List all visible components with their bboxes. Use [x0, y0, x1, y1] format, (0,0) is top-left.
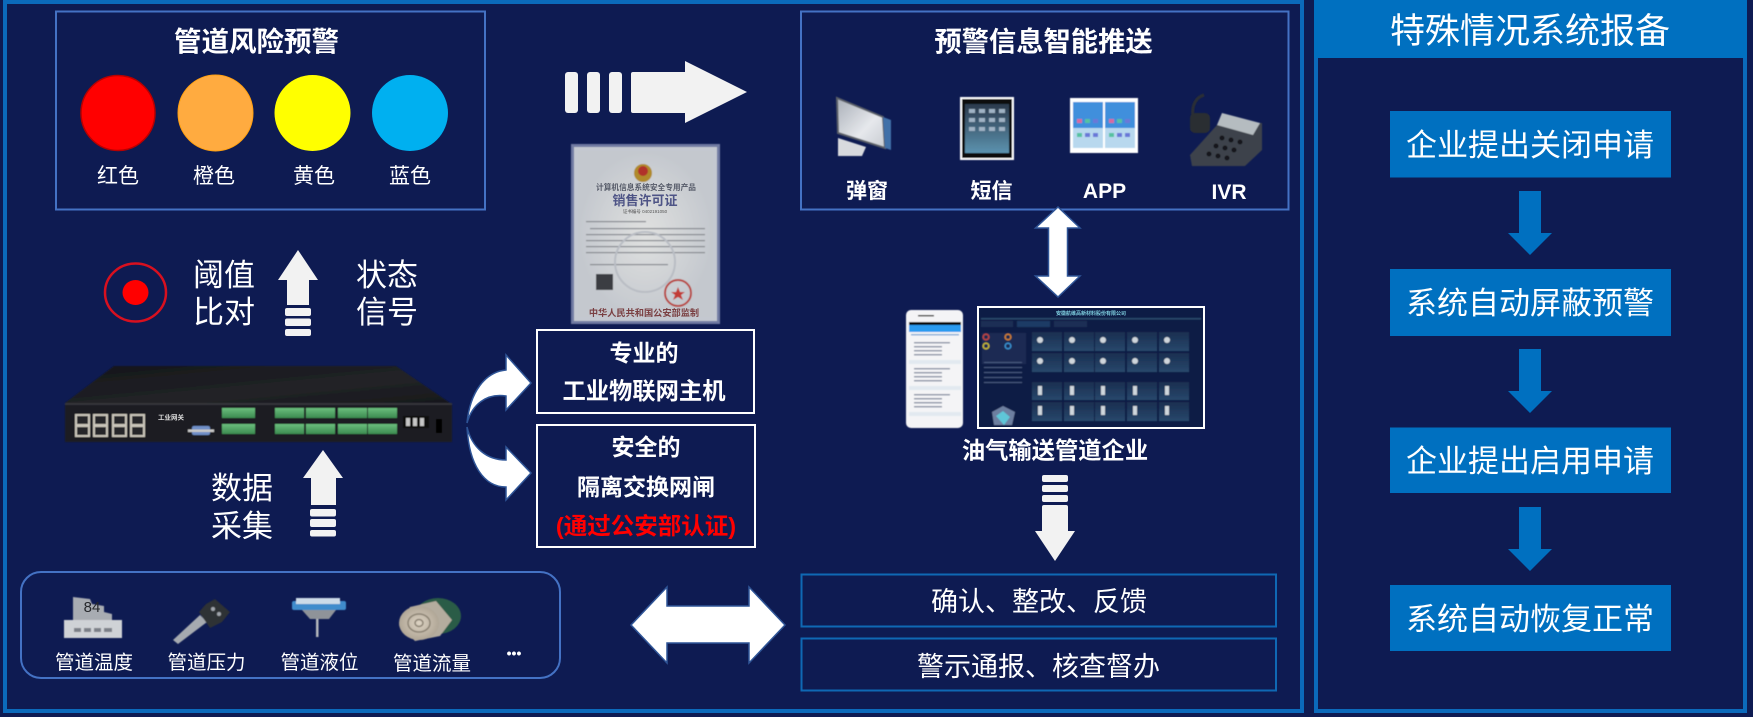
step 3: 企业提出启用申请: [1406, 444, 1654, 479]
step 1: [1390, 111, 1671, 178]
step 2: 系统自动屏蔽预警: [1406, 286, 1654, 321]
arrow 1: [1508, 191, 1552, 255]
sensor: pressure: [167, 599, 246, 674]
arrow: data collection up: [303, 450, 343, 536]
arrow 2: [1508, 349, 1552, 413]
red level: 红色: [97, 165, 139, 188]
orange level: 橙色: [193, 165, 235, 188]
panel: isolation gateway: 安全的: [612, 434, 680, 460]
sensor: pressure: 管道压力: [167, 652, 246, 674]
step 3: [1390, 428, 1671, 493]
panel: sensors: [21, 572, 560, 678]
panel: isolation gateway: 隔离交换网闸: [577, 474, 715, 500]
step 2: [1390, 269, 1671, 336]
sensor: temperature: 84: [84, 599, 100, 616]
channel: IVR: [1190, 95, 1262, 204]
label: data collection: 采集: [211, 509, 273, 544]
image: sales license certificate: 销售许可证: [612, 193, 678, 208]
step 4: 系统自动恢复正常: [1406, 602, 1654, 637]
panel: intelligent push: [801, 12, 1288, 210]
panel: special case reporting: [1314, 0, 1747, 711]
label: threshold comparison: 比对: [193, 295, 255, 330]
arrow: enterprise down: [1035, 475, 1075, 561]
sensor: liquid level: 管道液位: [280, 652, 359, 674]
heading bar: [1314, 0, 1747, 58]
channel: APP: [1070, 98, 1138, 203]
heading: intelligent push: 预警信息智能推送: [934, 26, 1153, 57]
orange level: [178, 75, 253, 188]
arrow: gateway split: [467, 355, 531, 500]
step 1: 企业提出关闭申请: [1406, 128, 1654, 163]
step 4: [1390, 585, 1671, 651]
arrow: bidirectional horizontal: [631, 587, 785, 663]
panel: pipeline risk warning: [56, 12, 485, 210]
image: industrial gateway: 工业网关: [158, 412, 184, 422]
image: mobile app: [906, 310, 963, 428]
channel: APP: APP: [1083, 180, 1126, 203]
image: monitoring dashboard: 安徽航维高新材料股份有限公司: [1056, 310, 1126, 317]
heading: pipeline risk warning: 管道风险预警: [174, 26, 339, 57]
heading bar: 特殊情况系统报备: [1390, 12, 1670, 51]
label: status signal: 信号: [356, 295, 418, 330]
yellow level: 黄色: [293, 165, 335, 188]
ellipsis: •••: [507, 645, 521, 661]
panel: main flow frame: [5, 2, 1302, 711]
channel: IVR: IVR: [1211, 181, 1247, 204]
sensor: liquid level: [280, 598, 359, 674]
panel: confirm, rectify, feedback: 确认、整改、反馈: [931, 587, 1147, 617]
panel: IoT host: 专业的: [610, 340, 678, 366]
red level: [81, 76, 155, 188]
label: threshold comparison: 阈值: [193, 258, 255, 293]
channel: SMS: 短信: [970, 180, 1012, 203]
channel: popup: 弹窗: [846, 180, 888, 203]
sensor: flow: 管道流量: [393, 653, 471, 675]
blue level: [372, 75, 448, 188]
panel: confirm, rectify, feedback: [802, 574, 1276, 626]
panel: warning bulletin, supervision: 警示通报、核查督办: [917, 652, 1160, 682]
arrow: status signal up: [278, 250, 318, 336]
blue level: 蓝色: [389, 165, 431, 188]
panel: isolation gateway: (通过公安部认证): [556, 513, 736, 539]
channel: popup: [837, 98, 891, 203]
panel: IoT host: [537, 330, 754, 413]
image: sales license certificate: 计算机信息系统安全专用产品: [596, 182, 696, 192]
label: status signal: 状态: [356, 258, 418, 293]
yellow level: [274, 75, 350, 188]
panel: IoT host: 工业物联网主机: [562, 378, 726, 404]
label: data collection: 数据: [211, 471, 273, 506]
image: industrial gateway: [65, 366, 452, 442]
arrow 3: [1508, 507, 1552, 571]
label: pipeline enterprise: 油气输送管道企业: [962, 438, 1148, 464]
sensor: temperature: 管道温度: [55, 652, 133, 674]
image: monitoring dashboard: [978, 307, 1204, 428]
image: sales license certificate: [571, 144, 720, 324]
icon: threshold target: [105, 264, 166, 322]
sensor: flow: [393, 598, 471, 675]
image: sales license certificate: 中华人民共和国公安部监制: [589, 307, 699, 318]
sensor: temperature: [55, 597, 133, 674]
arrow: bidirectional vertical: [1036, 207, 1080, 297]
panel: isolation gateway: [537, 425, 755, 547]
channel: SMS: [960, 97, 1014, 203]
image: sales license certificate: 证书编号 0402191050: [623, 208, 668, 215]
panel: warning bulletin, supervision: [802, 638, 1276, 690]
arrow: push to notifications: [565, 61, 747, 123]
